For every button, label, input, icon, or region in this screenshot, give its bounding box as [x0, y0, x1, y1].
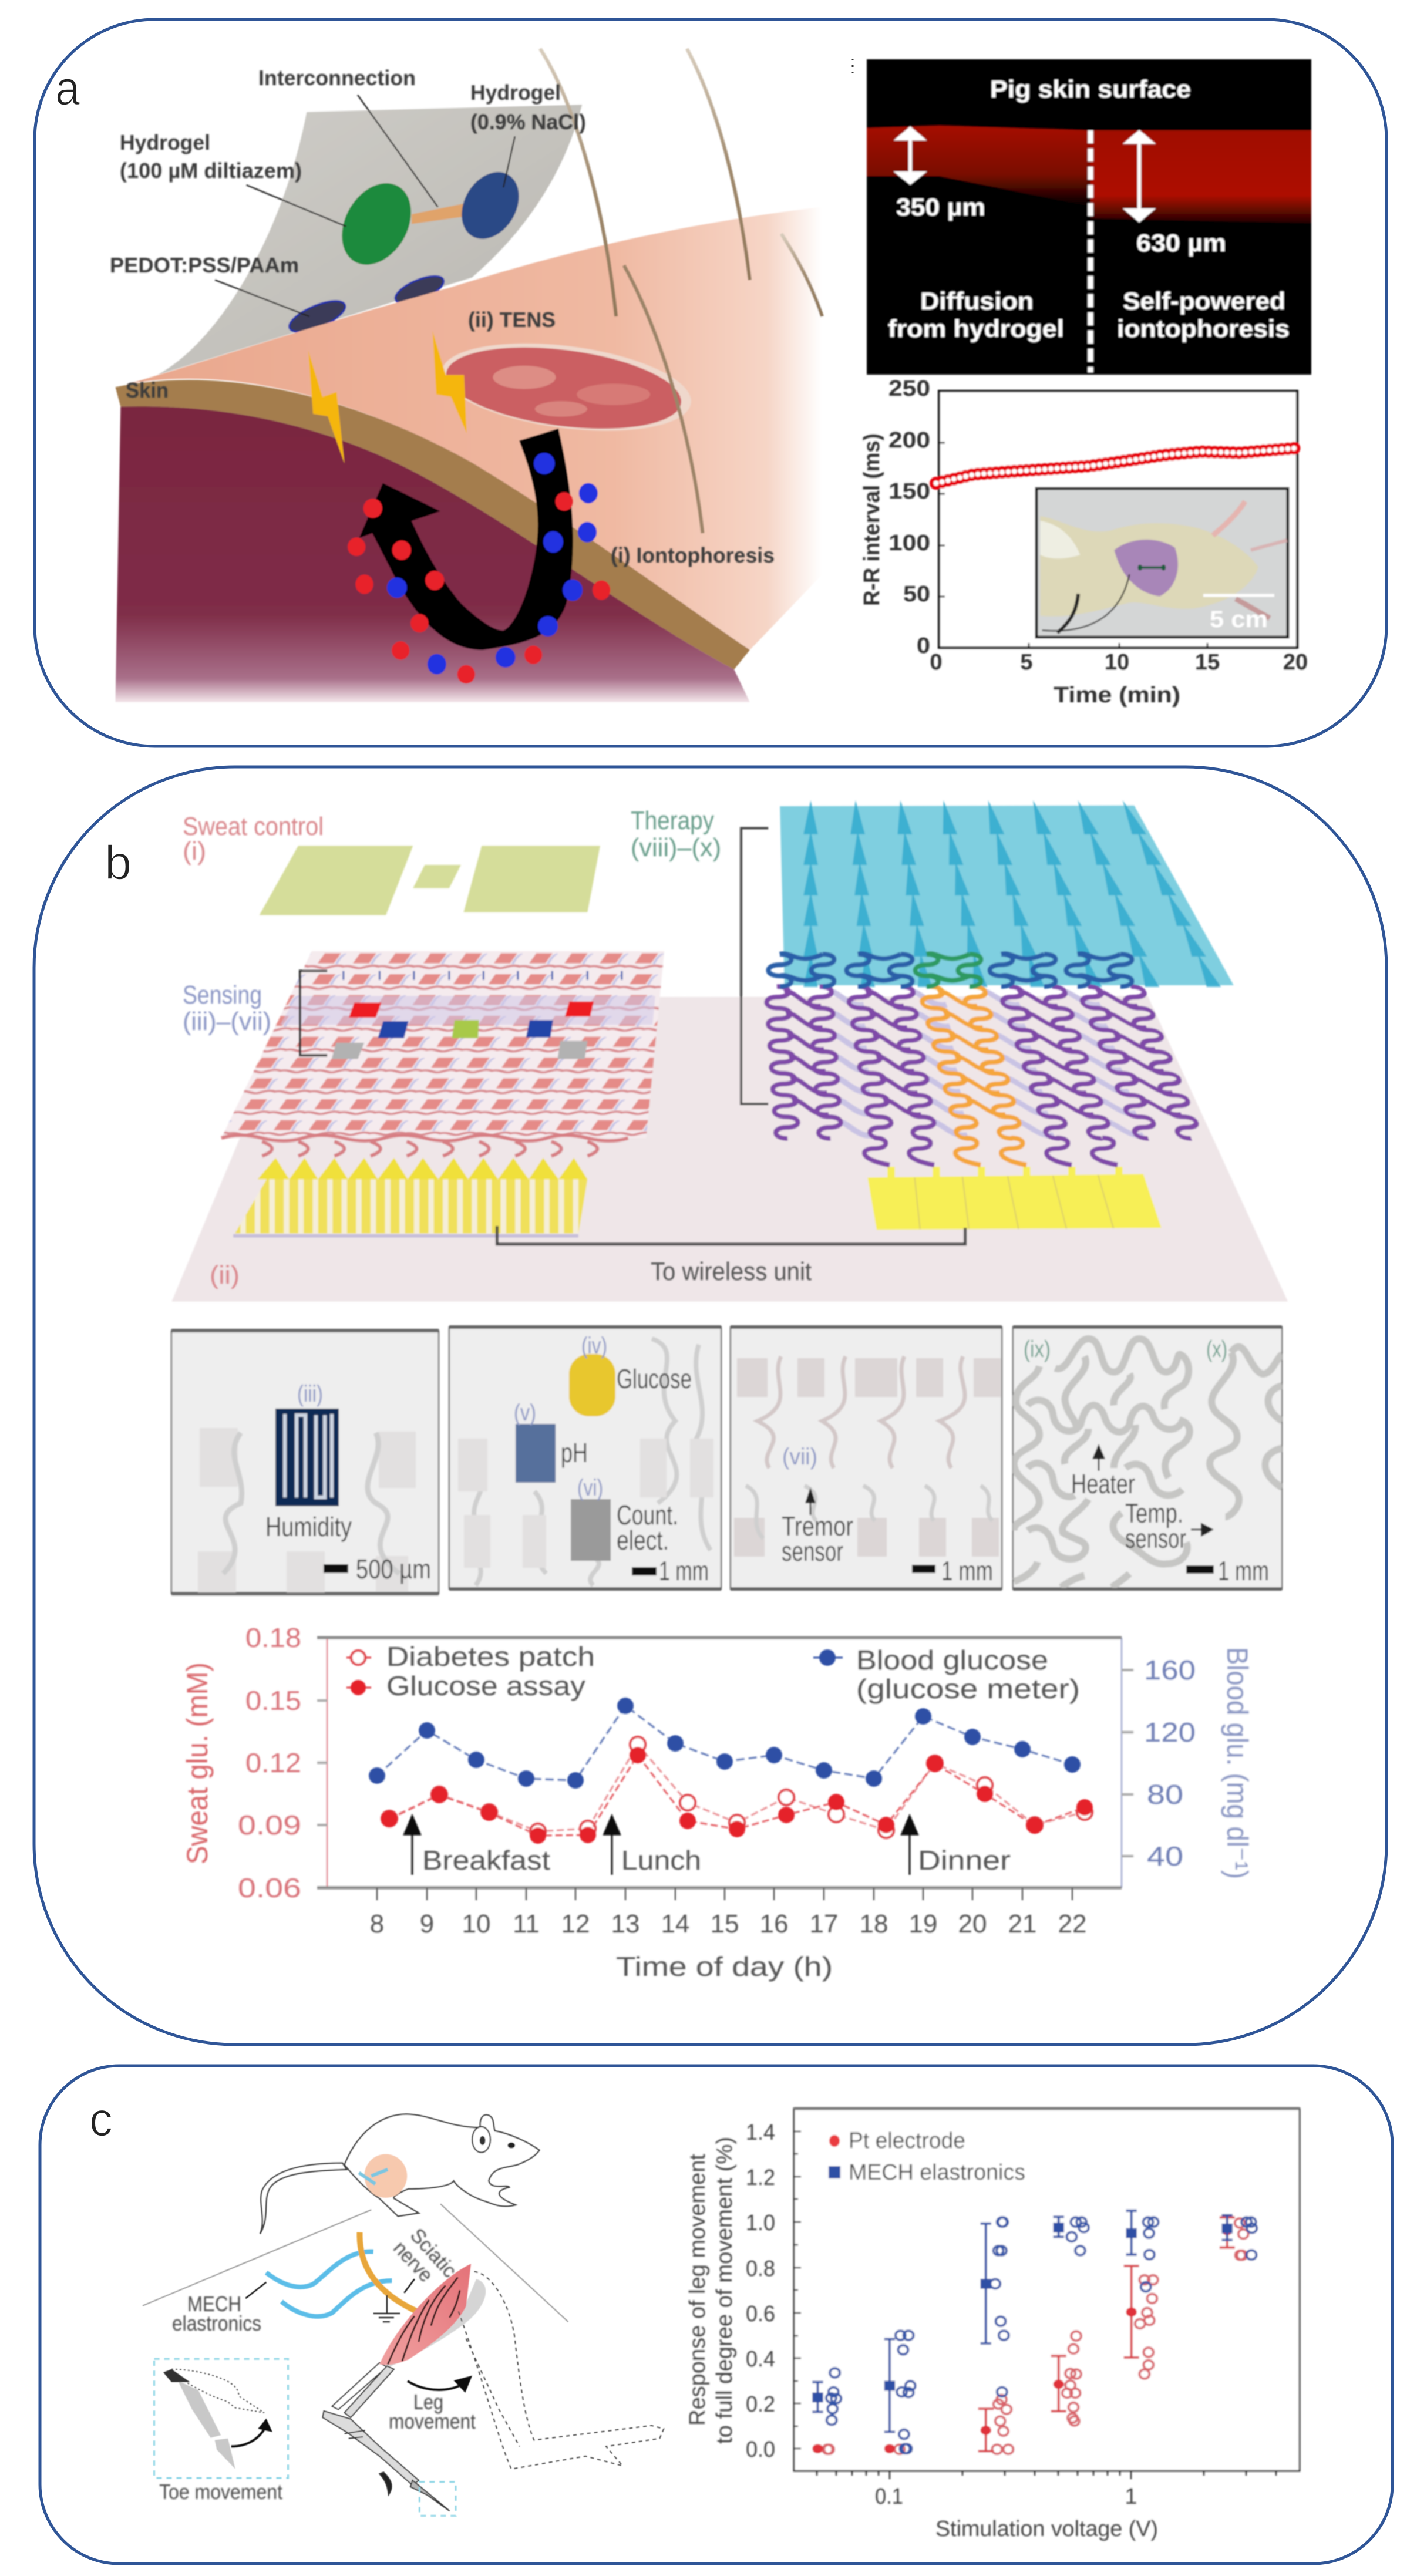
blue means with error bars: [812, 2211, 1233, 2432]
micrograph: tremor sensor: 1 mm: [941, 1555, 993, 1586]
panel a: self-powered iontophoresis: [35, 19, 1386, 746]
therapy bracket: [741, 828, 768, 1104]
micrograph: heater and temperature sensor: sensor: [1125, 1523, 1186, 1554]
micrograph: tremor sensor: [731, 1327, 1002, 1589]
micrograph: glucose, pH, counter electrode: (vi): [577, 1475, 603, 1501]
y ticks and labels: 50: [903, 582, 930, 607]
schematic labels: To wireless unit: [651, 1257, 812, 1286]
plot frame: [794, 2109, 1300, 2471]
illustration labels: MECH: [187, 2292, 241, 2316]
open blue points: [826, 2217, 1257, 2453]
ground symbol: [373, 2295, 400, 2322]
stimulation response scatter plot: to full degree of movement (%): [712, 2137, 737, 2444]
schematic labels: (viii)–(x): [631, 833, 721, 862]
depth arrows: [898, 129, 1151, 220]
pig skin image: iontophoresis: [1117, 315, 1290, 342]
x labels: 1: [1125, 2484, 1137, 2509]
crop marks: [851, 59, 854, 78]
illustration: patch on skin: [115, 49, 822, 702]
leg bones: [322, 2279, 486, 2511]
illustration labels: Leg: [413, 2390, 443, 2414]
micrograph: heater and temperature sensor: 1 mm: [1218, 1555, 1269, 1586]
leg movement arrow: [408, 2376, 472, 2393]
x labels: 13: [611, 1910, 639, 1938]
y labels: 0.0: [746, 2437, 775, 2462]
micrograph: humidity sensor: Humidity: [265, 1511, 352, 1542]
y labels: 1.0: [746, 2211, 775, 2235]
x labels: 14: [661, 1910, 689, 1938]
schematic labels: Sensing: [183, 981, 262, 1009]
y ticks and labels: 200: [888, 428, 930, 453]
micrograph: heater and temperature sensor: Heater: [1071, 1469, 1135, 1499]
left axis labels: 0.06: [238, 1873, 301, 1903]
left axis labels: 0.15: [245, 1685, 301, 1716]
inset rat photo: 5 cm: [1210, 607, 1268, 632]
schematic labels: [183, 806, 812, 1289]
micrograph: heater and temperature sensor: Temp.: [1125, 1498, 1183, 1528]
labels on illustration: Hydrogel: [120, 130, 210, 154]
micrograph: glucose, pH, counter electrode: (iv): [581, 1333, 607, 1359]
sciatic nerve: [360, 2232, 416, 2311]
x labels: 15: [711, 1910, 739, 1938]
red ions: [348, 492, 610, 683]
wireless connector: [497, 1226, 965, 1244]
series: diabetes patch: [382, 1737, 1092, 1839]
device sheet: [157, 105, 582, 375]
chart frame: [317, 1638, 1122, 1888]
x labels: 0: [930, 650, 943, 675]
therapy microneedle sheet: [780, 800, 1234, 987]
device exploded schematic: [171, 800, 1288, 1302]
sweat control pads: [260, 846, 600, 915]
tails to pads: [864, 1138, 1118, 1165]
legend: MECH elastronics: [849, 2160, 1025, 2185]
x labels: [875, 2484, 1137, 2509]
open red points: [823, 2218, 1248, 2454]
panel c frame: [40, 2066, 1392, 2564]
top blue pairs: [768, 954, 1132, 986]
x labels: 22: [1058, 1910, 1086, 1938]
pig skin image: Pig skin surface: [990, 75, 1191, 103]
legend: (glucose meter): [856, 1673, 1080, 1704]
series: blood glucose: [369, 1698, 1081, 1789]
skin surface: [126, 207, 822, 650]
schematic labels: Therapy: [631, 806, 714, 835]
curved black arrow: [359, 429, 573, 650]
micrograph: glucose, pH, counter electrode: [449, 1327, 721, 1589]
micrograph: glucose, pH, counter electrode: (v): [514, 1400, 536, 1426]
pig skin image: 630 µm: [1136, 229, 1226, 257]
left axis labels: 0.09: [238, 1810, 301, 1840]
TENS area: [436, 331, 697, 444]
panel b frame: [34, 767, 1386, 2045]
stimulation response scatter plot: [685, 2109, 1300, 2541]
sensing bracket: [300, 971, 327, 1055]
glucose line chart: Time of day (h): [616, 1951, 833, 1982]
micrograph: tremor sensor: (vii): [782, 1444, 817, 1470]
illustration labels: nerve: [389, 2237, 437, 2287]
panel b: diabetes patch: [34, 767, 1386, 2045]
sensor patches: [332, 1001, 594, 1059]
x labels: [930, 650, 1308, 675]
top green pair: [915, 954, 981, 986]
left axis labels: 0.18: [245, 1622, 301, 1653]
schematic labels: (iii)–(vii): [183, 1007, 271, 1036]
skin hairs: [540, 49, 822, 316]
labels on illustration: (ii) TENS: [468, 308, 556, 332]
legend: Blood glucose: [856, 1645, 1048, 1675]
hair over patch: [624, 265, 702, 533]
legend: Glucose assay: [386, 1671, 585, 1701]
micrograph: glucose, pH, counter electrode: pH: [561, 1437, 588, 1468]
therapy serpentine layers: [766, 954, 1203, 1165]
labels on illustration: (100 µM diltiazem): [120, 159, 302, 183]
x labels: 15: [1195, 650, 1220, 675]
micrograph: heater and temperature sensor: (x): [1206, 1336, 1227, 1362]
panel c: MECH elastronics: [40, 2066, 1392, 2564]
foot inset marker: [419, 2482, 456, 2516]
right axis labels: [1144, 1655, 1196, 1871]
right axis labels: 120: [1144, 1717, 1196, 1747]
y labels: 0.4: [746, 2347, 775, 2372]
labels on illustration: (i) Iontophoresis: [611, 543, 775, 567]
meal labels: Breakfast: [422, 1845, 550, 1875]
meal labels: [422, 1845, 1011, 1875]
glucose line chart: Blood glu. (mg dl⁻¹): [1221, 1647, 1254, 1879]
ghost leg: [458, 2272, 664, 2469]
R-R interval chart: Time (min): [1054, 683, 1180, 708]
blue ions: [387, 453, 598, 674]
magnification guides: [143, 2204, 568, 2322]
x labels: 9: [420, 1910, 434, 1938]
micrograph: humidity sensor: (iii): [297, 1381, 323, 1407]
y axis titles: Response of leg movement: [685, 2154, 710, 2426]
x labels: 17: [810, 1910, 838, 1938]
labels on illustration: PEDOT:PSS/PAAm: [110, 253, 299, 277]
floor: [171, 996, 1288, 1302]
y labels: 0.6: [746, 2302, 775, 2326]
lightning bolts: [308, 331, 467, 463]
R-R interval chart: R-R interval (ms): [860, 433, 884, 606]
left axis labels: [238, 1622, 301, 1903]
nerve pointer: [404, 2279, 415, 2293]
x ticks: [377, 1888, 1072, 1900]
labels on illustration: [110, 66, 775, 567]
micrograph: humidity sensor: [171, 1331, 439, 1594]
x labels: 0.1: [875, 2484, 903, 2509]
sensing mesh: [221, 951, 664, 1156]
y ticks and labels: 0: [917, 634, 930, 658]
micrograph: glucose, pH, counter electrode: elect.: [617, 1525, 669, 1555]
purple heater pairs: [766, 986, 1203, 1139]
x labels: 21: [1008, 1910, 1036, 1938]
right gold pads: [867, 1167, 1162, 1230]
illustration labels: [159, 2224, 476, 2504]
y labels: 0.8: [746, 2257, 775, 2281]
axis titles: Sweat glu. (mM): [181, 1662, 214, 1864]
y ticks and labels: 150: [888, 479, 930, 504]
illustration labels: Toe movement: [159, 2480, 282, 2504]
x labels: 18: [860, 1910, 888, 1938]
micrograph: tremor sensor: Tremor: [782, 1511, 853, 1541]
right axis labels: 40: [1147, 1841, 1183, 1871]
x labels: 10: [462, 1910, 490, 1938]
illustration labels: elastronics: [172, 2311, 261, 2335]
micrograph: heater and temperature sensor: (ix): [1024, 1336, 1051, 1362]
panel letter c: c: [89, 2093, 113, 2146]
legend: [346, 1641, 1080, 1704]
lavender interconnect links: [829, 992, 1144, 1136]
rat leg illustration: [143, 2114, 664, 2516]
legend: Pt electrode: [849, 2129, 965, 2153]
toe inset: [154, 2359, 288, 2478]
pig skin image: Diffusion: [920, 287, 1034, 315]
y ticks and labels: 100: [888, 531, 930, 555]
right axis labels: 80: [1147, 1779, 1183, 1810]
x labels: 19: [909, 1910, 937, 1938]
MECH pointer: [245, 2282, 266, 2298]
x labels: 16: [760, 1910, 788, 1938]
panel letter a: a: [55, 62, 80, 115]
x labels: 5: [1020, 650, 1033, 675]
x labels: 8: [370, 1910, 384, 1938]
micrograph: glucose, pH, counter electrode: Count.: [617, 1500, 678, 1530]
pig skin image: 350 µm: [896, 193, 985, 221]
illustration labels: movement: [389, 2409, 476, 2433]
left gold comb contacts: [233, 1158, 587, 1236]
y labels: 1.2: [746, 2166, 775, 2190]
inset rat photo: [1036, 489, 1288, 637]
schematic labels: (i): [183, 837, 206, 866]
right axis labels: 160: [1144, 1655, 1196, 1685]
leader lines: [215, 95, 515, 316]
muscle layer: [115, 406, 750, 702]
x labels: 12: [561, 1910, 590, 1938]
labels on illustration: Interconnection: [258, 66, 416, 90]
red means with error bars: [812, 2217, 1235, 2453]
meal labels: Lunch: [621, 1845, 701, 1875]
micrograph: heater and temperature sensor: [1013, 1327, 1282, 1589]
pig skin image: Self-powered: [1123, 287, 1285, 315]
labels on illustration: (0.9% NaCl): [470, 110, 586, 134]
y labels: 1.4: [746, 2120, 775, 2145]
labels on illustration: Hydrogel: [470, 80, 561, 105]
y labels: 0.2: [746, 2392, 775, 2417]
x labels: [370, 1910, 1086, 1938]
y labels: [746, 2120, 775, 2462]
R-R interval chart: [860, 376, 1308, 708]
x labels: 20: [958, 1910, 987, 1938]
micrograph: tremor sensor: sensor: [782, 1536, 843, 1567]
x labels: 20: [1283, 650, 1308, 675]
pig skin image: from hydrogel: [888, 315, 1064, 342]
stimulation response scatter plot: Stimulation voltage (V): [935, 2517, 1158, 2541]
pig skin image: [867, 59, 1311, 375]
meal arrows: [403, 1814, 918, 1875]
y ticks and labels: 250: [888, 376, 930, 401]
panel a frame: [35, 19, 1386, 746]
schematic labels: Sweat control: [183, 812, 324, 841]
legend: [829, 2129, 1025, 2185]
micrograph: humidity sensor: 500 µm: [356, 1554, 431, 1584]
micrograph: glucose, pH, counter electrode: Glucose: [617, 1363, 692, 1394]
y ticks and labels: [888, 376, 930, 658]
series: glucose assay: [381, 1747, 1093, 1844]
orange therapy pair: [918, 986, 1024, 1139]
scatter marks: [812, 2211, 1257, 2454]
left axis labels: 0.12: [245, 1747, 301, 1778]
micrograph: glucose, pH, counter electrode: 1 mm: [659, 1555, 709, 1586]
x labels: 11: [513, 1910, 540, 1938]
data series: [936, 448, 1296, 483]
legend: Diabetes patch: [386, 1641, 595, 1672]
illustration labels: Sciatic: [406, 2224, 461, 2282]
dermis layer: [115, 380, 750, 669]
glucose line chart: [181, 1622, 1254, 1982]
rat outline: [260, 2114, 539, 2234]
schematic labels: (ii): [210, 1261, 240, 1289]
meal labels: Dinner: [918, 1845, 1011, 1875]
labels on illustration: Skin: [126, 378, 169, 402]
panel letter b: b: [105, 836, 132, 890]
muscle: [379, 2264, 471, 2365]
blue electrodes: [266, 2251, 392, 2316]
x labels: 10: [1105, 650, 1129, 675]
